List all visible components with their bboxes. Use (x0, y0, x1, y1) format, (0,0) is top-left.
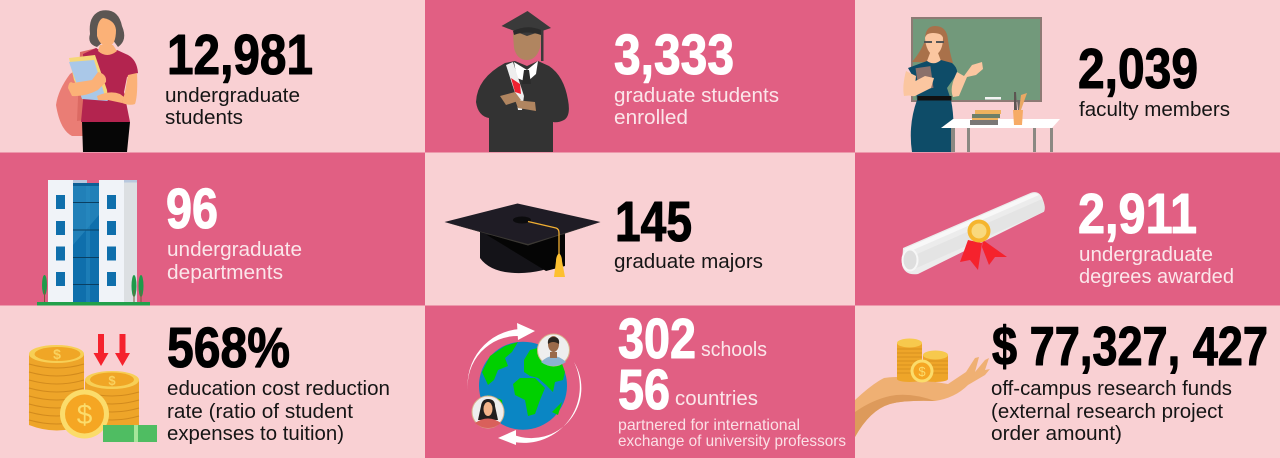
panel: undergraduate departments (0, 152, 425, 306)
heading: 12,981: 12,981 (167, 23, 313, 87)
icon: teacher at chalkboard (903, 18, 1060, 152)
heading: 302: 302 (618, 307, 696, 371)
text: undergraduate departments: departments (167, 261, 283, 284)
text: education cost reduction rate: rate (ratio of student (167, 400, 353, 423)
panel: off-campus research funds (855, 306, 1280, 458)
heading: 568%: 568% (167, 316, 290, 380)
icon: graduate in gown (476, 11, 569, 152)
text: partnered for international exchange: exchange of university professors (618, 433, 846, 450)
icon: hand holding coins (855, 338, 990, 437)
text: undergraduate degrees awarded: degrees awarded (1079, 265, 1234, 288)
text: schools: schools (701, 338, 767, 361)
icon: coin stacks with down arrows: $ (108, 373, 116, 388)
panel: education cost reduction rate (0, 306, 425, 458)
heading: 2,039: 2,039 (1078, 37, 1198, 101)
panel: faculty members (855, 0, 1280, 152)
icon: globe with exchange arrows and people (468, 323, 581, 445)
text: off-campus research funds: order amount) (991, 422, 1122, 445)
text: faculty members: faculty members (1079, 98, 1230, 121)
text: graduate students enrolled: graduate students (614, 84, 779, 107)
text: graduate students enrolled: enrolled (614, 106, 688, 129)
panel: undergraduate students (0, 0, 425, 152)
heading: 3,333: 3,333 (614, 23, 734, 87)
icon: diploma scroll with ribbon (902, 192, 1045, 274)
icon: coin stacks with down arrows: $ (53, 346, 61, 362)
panel: graduate majors (425, 152, 855, 306)
text: off-campus research funds: off-campus research funds (991, 377, 1232, 400)
heading: 96: 96 (166, 177, 218, 241)
text: education cost reduction rate: expenses to tuition) (167, 422, 344, 445)
text: undergraduate degrees awarded: undergraduate (1079, 243, 1213, 266)
text: countries: countries (675, 387, 758, 410)
icon: university building (37, 180, 150, 306)
icon: coin stacks with down arrows: $ (77, 399, 93, 430)
icon: mortarboard cap (444, 204, 600, 277)
icon: coin stacks with down arrows (29, 334, 157, 442)
text: undergraduate departments: undergraduate (167, 238, 302, 261)
text: undergraduate students: undergraduate (165, 84, 300, 107)
heading: 2,911: 2,911 (1078, 182, 1197, 246)
panel: graduate students (425, 0, 855, 152)
heading: 56: 56 (618, 358, 670, 422)
heading: 145: 145 (615, 190, 692, 254)
text: graduate majors: graduate majors (614, 250, 763, 273)
icon: student with books and backpack (56, 10, 138, 152)
panel: undergraduate degrees awarded (855, 152, 1280, 306)
panel: international partners (425, 306, 855, 458)
text: partnered for international exchange: partnered for international (618, 417, 800, 434)
text: education cost reduction rate: education cost reduction (167, 377, 390, 400)
text: off-campus research funds: (external research project (991, 400, 1223, 423)
text: undergraduate students: students (165, 106, 243, 129)
icon: hand holding coins: $ (918, 364, 926, 379)
